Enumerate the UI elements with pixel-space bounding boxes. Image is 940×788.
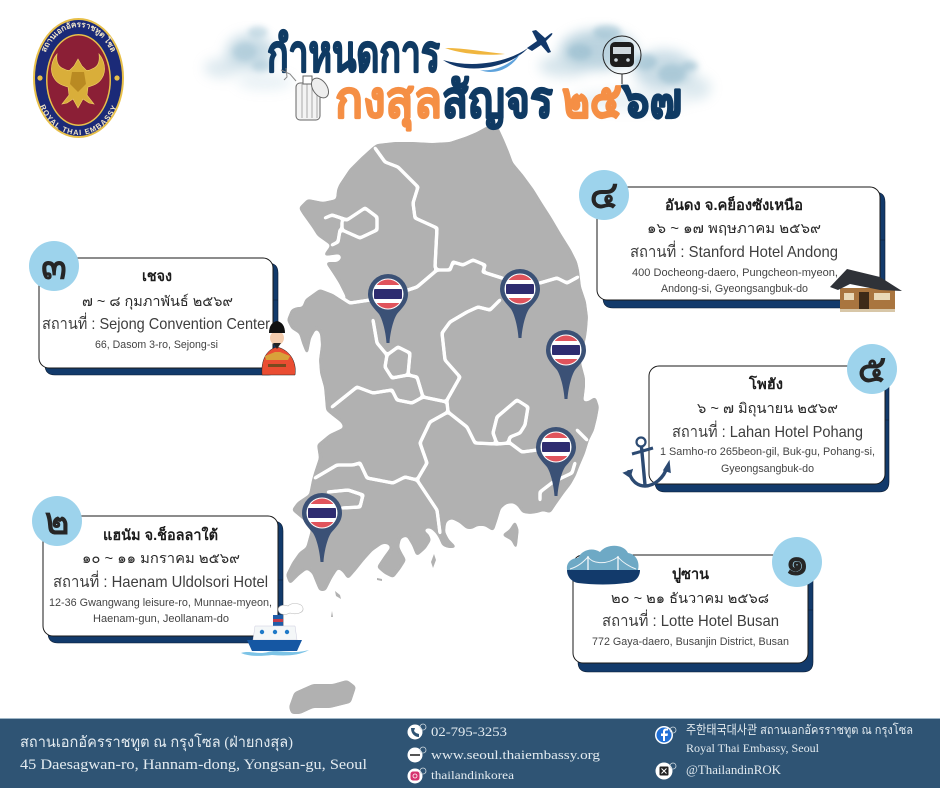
venue text: สถานที่ : Sejong Convention Center [42, 312, 271, 333]
icon: hanok house [830, 269, 902, 312]
contact: website: www.seoul.thaiembassy.org [431, 747, 601, 762]
number 1: ๑ [785, 542, 809, 584]
venue text: Haenam-gun, Jeollanam-do [93, 613, 229, 625]
venue text [660, 375, 875, 475]
venue text: สถานที่ : Stanford Hotel Andong [630, 240, 838, 261]
venue text: ๑๐ ~ ๑๑ มกราคม ๒๕๖๙ [82, 550, 240, 566]
contact: instagram: thailandinkorea [431, 768, 515, 782]
contact: facebook page: Royal Thai Embassy, Seoul [686, 741, 820, 755]
venue text [49, 525, 272, 625]
title: สัญจร [442, 72, 553, 129]
number 4: ๔ [590, 175, 618, 217]
icon: anchor [624, 438, 670, 486]
venue text: อันดง จ.คย็องซังเหนือ [665, 195, 803, 214]
venue text: ปูซาน [672, 567, 709, 583]
contact: X handle: @ThailandinROK [686, 763, 781, 777]
panel: stop 4 Andong [579, 170, 885, 308]
title [267, 26, 682, 131]
icon: Busan bridge cloud [567, 546, 640, 584]
venue text: 12-36 Gwangwang leisure-ro, Munnae-myeon, [49, 597, 272, 609]
icon: airplane with swoosh [443, 30, 552, 72]
map pin: Andong [500, 269, 540, 338]
venue text: 400 Docheong-daero, Pungcheon-myeon, [632, 267, 838, 279]
number 2: ๒ [44, 501, 70, 543]
icon: suitcase and small plane [281, 68, 332, 120]
footer bar [0, 718, 940, 788]
venue text: ๒๐ ~ ๒๑ ธันวาคม ๒๕๖๘ [611, 590, 769, 606]
map pin: Busan [536, 427, 576, 496]
icon: phone [408, 724, 426, 740]
venue text: โพฮัง [748, 375, 783, 393]
venue text: 1 Samho-ro 265beon-gil, Buk-gu, Pohang-si, [660, 446, 875, 458]
venue text [42, 269, 271, 351]
icon: web [408, 747, 426, 762]
map pin: Sejong [368, 274, 408, 343]
venue text: ๑๖ ~ ๑๗ พฤษภาคม ๒๕๖๙ [647, 220, 821, 236]
embassy seal [33, 18, 124, 138]
venue text: สถานที่ : Haenam Uldolsori Hotel [53, 570, 268, 591]
icon: facebook [655, 726, 676, 744]
cloud: title right [539, 25, 711, 110]
number 5: ๕ [858, 349, 886, 391]
venue text: Andong-si, Gyeongsangbuk-do [661, 283, 808, 295]
cloud: title left [204, 26, 293, 90]
icon: bus stop sign [603, 36, 641, 84]
icon: Korean king [262, 321, 295, 375]
venue text: ๗ ~ ๘ กุมภาพันธ์ ๒๕๖๙ [82, 293, 233, 310]
venue text: 772 Gaya-daero, Busanjin District, Busan [592, 636, 789, 648]
panel: stop 3 Sejong [29, 241, 278, 375]
contact: facebook page [686, 722, 913, 755]
venue text: 66, Dasom 3-ro, Sejong-si [95, 339, 218, 351]
panel: stop 2 Haenam [32, 496, 283, 643]
icon: ship [241, 604, 309, 656]
panel: stop 5 Pohang [649, 344, 897, 492]
map pin: Haenam [302, 493, 342, 562]
number 3: ๓ [41, 246, 67, 288]
venue text: เชจง [142, 269, 172, 285]
embassy name and address [20, 733, 367, 773]
venue text: แฮนัม จ.ช็อลลาใต้ [103, 525, 218, 544]
venue text: สถานที่ : Lahan Hotel Pohang [672, 420, 863, 441]
map pin: Pohang [546, 330, 586, 399]
title: ๒๕ [562, 72, 622, 128]
contact: phone number: 02-795-3253 [431, 724, 507, 739]
map of South Korea [287, 127, 598, 713]
embassy seal: สถานเอกอัครราชทูต โซล [42, 22, 115, 52]
icon: instagram [408, 768, 426, 784]
embassy seal: ROYAL THAI EMBASSY [40, 104, 116, 136]
venue text [630, 195, 838, 295]
title: กำหนดการ [267, 26, 440, 82]
venue text [592, 567, 789, 648]
venue text: สถานที่ : Lotte Hotel Busan [602, 609, 779, 630]
icon: X [656, 762, 676, 780]
embassy name and address: 45 Daesagwan-ro, Hannam-dong, Yongsan-gu, Seoul [20, 757, 367, 773]
venue text: Gyeongsangbuk-do [721, 463, 814, 475]
title: กงสุล [335, 72, 442, 131]
panel: stop 1 Busan [573, 537, 822, 672]
venue text: ๖ ~ ๗ มิถุนายน ๒๕๖๙ [697, 400, 838, 417]
title: ๖๗ [620, 72, 682, 128]
contact: facebook page: 주한태국대사관 สถานเอกอัครราชทูต ณ กรุงโซล [686, 722, 913, 738]
embassy name and address: สถานเอกอัครราชทูต ณ กรุงโซล (ฝ่ายกงสุล) [20, 733, 293, 752]
